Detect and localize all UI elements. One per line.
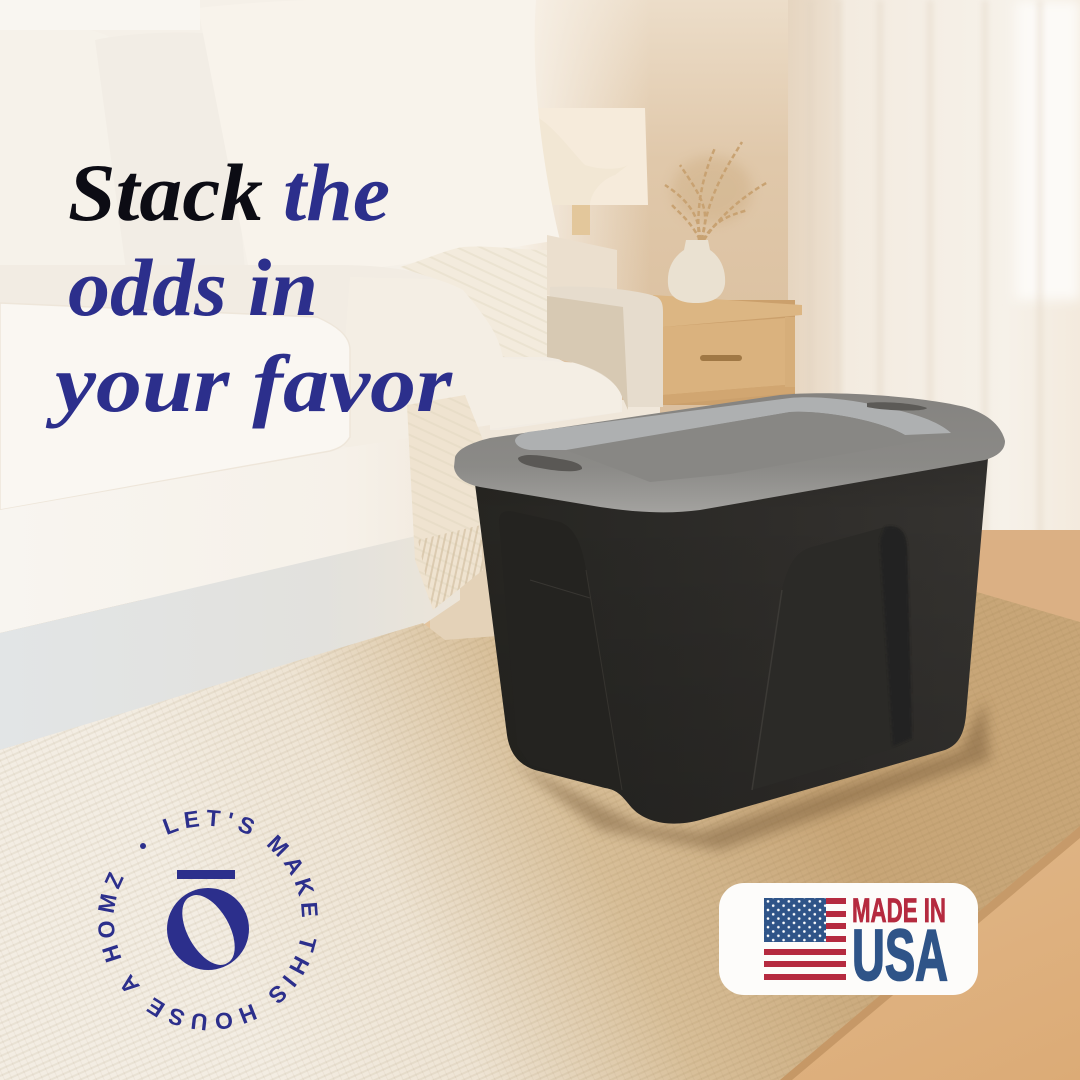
circular tagline: LET'S MAKE THIS HOUSE A HOMZ	[98, 810, 318, 1030]
area rug	[0, 590, 1080, 1080]
sofa base shadow	[0, 532, 460, 750]
badge text: USA: USA	[852, 916, 948, 996]
dried flowers in vase	[665, 142, 768, 303]
lid recess	[515, 397, 951, 450]
lid flat top	[566, 412, 925, 482]
table lamp	[527, 108, 648, 235]
sofa	[0, 0, 663, 750]
sofa seat back area	[0, 265, 622, 430]
brand seal	[98, 810, 318, 1030]
front seat cushion	[0, 303, 350, 510]
front recess panel	[752, 526, 912, 790]
lid handle slot	[867, 402, 927, 411]
separator dot	[140, 843, 146, 849]
sofa arm	[527, 287, 663, 410]
wood floor	[0, 600, 1080, 1080]
storage bin	[454, 393, 1005, 850]
side recess panel	[499, 511, 622, 790]
title line 3: your favor	[45, 338, 453, 429]
made in USA badge	[719, 883, 978, 996]
title line 1: Stack	[68, 147, 263, 238]
badge background	[719, 883, 978, 995]
title line 1	[68, 147, 390, 238]
sofa front	[0, 425, 490, 633]
title line 1: the	[283, 147, 390, 238]
icon: American flag	[764, 898, 846, 980]
window curtain	[788, 0, 1080, 548]
logo mark	[167, 870, 249, 970]
title	[45, 147, 453, 429]
title line 2: odds in	[68, 242, 318, 333]
bin body	[474, 458, 988, 824]
sofa back cushions	[0, 25, 130, 300]
nightstand	[653, 295, 802, 405]
wall	[520, 0, 1080, 640]
bin floor shadow	[510, 700, 990, 850]
bin lid	[454, 393, 1005, 512]
knit throw blanket	[400, 247, 547, 610]
lid handle slot	[518, 455, 582, 471]
badge text: made in: MADE IN	[852, 892, 946, 930]
